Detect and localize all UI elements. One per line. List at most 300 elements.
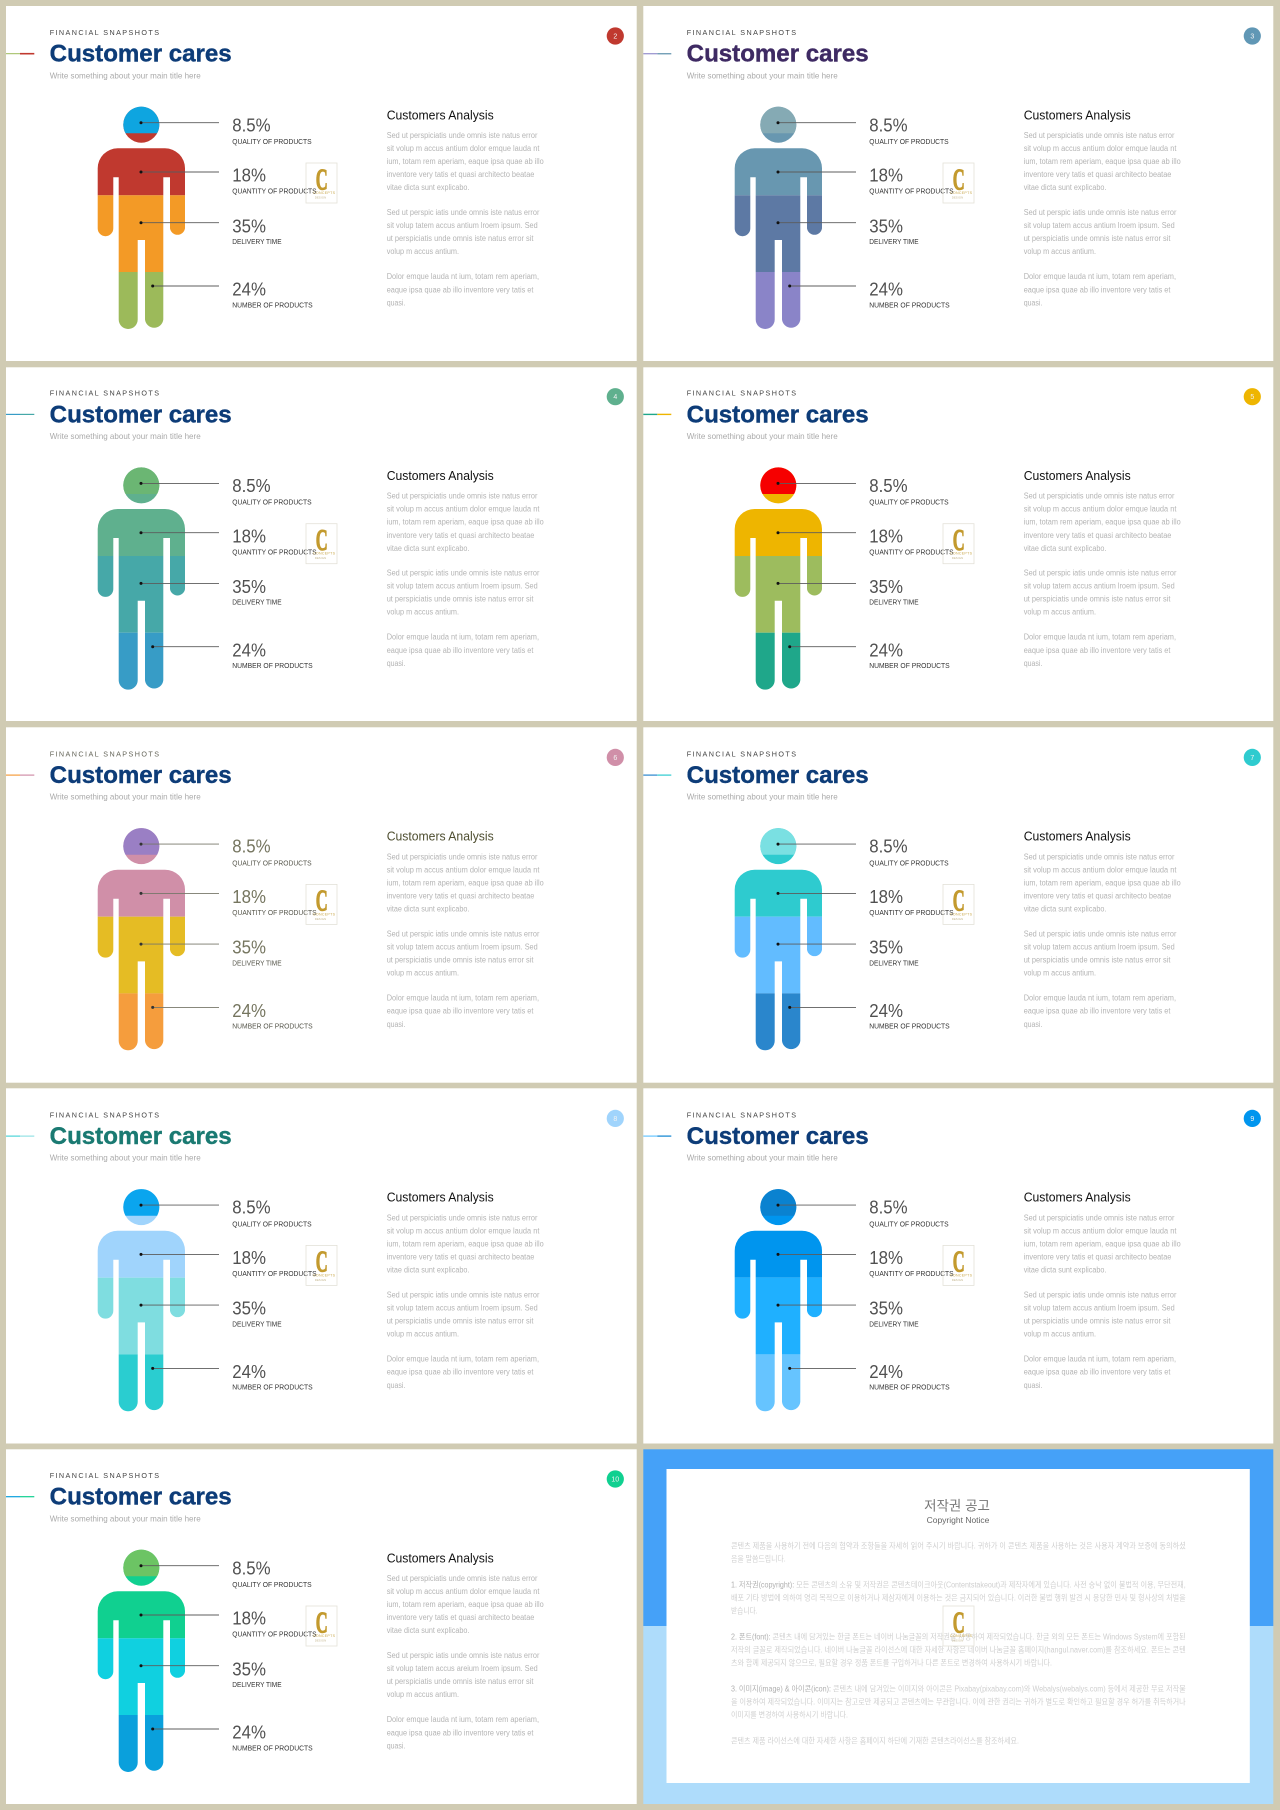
title: Customer cares: [687, 41, 869, 68]
callout: quantity of products: [776, 166, 954, 196]
notice body text: 이미지를 변경하여 사용하시기 바랍니다.: [731, 1709, 848, 1719]
watermark logo: [306, 1244, 337, 1285]
analysis body text: sit volup m accus antium dolor emque lauda nt: [1024, 865, 1177, 874]
analysis body text: quasi.: [1024, 1381, 1042, 1390]
watermark logo: C: [316, 522, 328, 557]
watermark logo: CONCEPTS: [313, 191, 336, 195]
analysis heading: Customers Analysis: [387, 469, 494, 483]
watermark logo: C: [316, 1604, 328, 1639]
accent line: [6, 414, 34, 415]
analysis body text: Dolor emque lauda nt ium, totam rem aperiam,: [387, 272, 539, 281]
analysis body text: ium, totam rem aperiam, eaque ipsa quae ab illo: [1024, 1239, 1181, 1248]
analysis body text: vitae dicta sunt explicabo.: [1024, 1266, 1106, 1275]
watermark logo: C: [953, 161, 965, 196]
analysis heading: Customers Analysis: [1024, 108, 1131, 122]
page badge: 4: [613, 394, 617, 401]
callout: delivery time: [776, 216, 919, 246]
callout: quantity of products: 18%: [869, 166, 903, 186]
callout: quantity of products: 18%: [232, 166, 266, 186]
analysis body text: Dolor emque lauda nt ium, totam rem aperiam,: [387, 633, 539, 642]
callout: delivery time: [776, 938, 919, 967]
watermark logo: CONCEPTS: [950, 1634, 973, 1638]
callout: quality of products: 8.5%: [869, 1198, 908, 1218]
human figure: [732, 467, 824, 693]
analysis body text: Sed ut perspic iatis unde omnis iste natus error: [387, 1290, 540, 1299]
watermark logo: CONCEPTS: [950, 912, 973, 916]
analysis body text: inventore very tatis et quasi architecto beatae: [1024, 170, 1172, 179]
analysis body text: eaque ipsa quae ab illo inventore very tatis et: [387, 646, 534, 655]
analysis body text: vitae dicta sunt explicabo.: [387, 544, 469, 553]
callout: number of products: 24%: [869, 1001, 903, 1021]
eyebrow: FINANCIAL SNAPSHOTS: [687, 28, 796, 37]
eyebrow: FINANCIAL SNAPSHOTS: [50, 389, 159, 398]
callout: number of products: 24%: [869, 640, 903, 660]
watermark logo: CONCEPTS: [313, 1634, 336, 1638]
analysis body text: quasi.: [387, 1020, 405, 1029]
analysis body text: volup m accus antium.: [1024, 968, 1096, 977]
panel: slide 6 purple pink yellow: [6, 727, 637, 1083]
callout: number of products: [151, 280, 313, 309]
analysis body text: ium, totam rem aperiam, eaque ipsa quae ab illo: [387, 157, 544, 166]
analysis body text: inventore very tatis et quasi architecto beatae: [387, 1613, 535, 1622]
callout: number of products: NUMBER OF PRODUCTS: [232, 661, 313, 670]
analysis body text: ut perspiciatis unde omnis iste natus error sit: [387, 1316, 534, 1325]
analysis body text: Dolor emque lauda nt ium, totam rem aperiam,: [387, 1715, 539, 1724]
page badge: [607, 1470, 624, 1488]
analysis body text: Sed ut perspiciatis unde omnis iste natus error: [1024, 492, 1175, 501]
subtitle: Write something about your main title here: [50, 431, 201, 441]
panel: slide 7 aqua sky blue: [643, 727, 1273, 1083]
callout: delivery time: DELIVERY TIME: [869, 237, 919, 246]
callout: quality of products: 8.5%: [869, 837, 908, 857]
analysis body text: sit volup m accus antium dolor emque lauda nt: [387, 505, 540, 514]
panel: slide 4 green teal: [6, 367, 637, 721]
watermark logo: C: [953, 883, 965, 918]
analysis body text: [387, 1213, 544, 1390]
callout: delivery time: 35%: [232, 938, 266, 958]
analysis heading: Customers Analysis: [387, 830, 494, 844]
callout: number of products: 24%: [232, 280, 266, 300]
callout: quantity of products: QUANTITY OF PRODUCTS: [232, 1630, 317, 1639]
analysis body text: ium, totam rem aperiam, eaque ipsa quae ab illo: [1024, 878, 1181, 887]
analysis body text: eaque ipsa quae ab illo inventore very tatis et: [387, 1007, 534, 1016]
page badge: [1244, 27, 1261, 45]
callout: quality of products: [776, 1198, 949, 1228]
accent line: [6, 53, 34, 54]
analysis body text: Sed ut perspic iatis unde omnis iste natus error: [387, 929, 540, 938]
analysis body text: inventore very tatis et quasi architecto beatae: [387, 170, 535, 179]
analysis body text: volup m accus antium.: [1024, 608, 1096, 617]
callout: quality of products: QUALITY OF PRODUCTS: [232, 1580, 312, 1589]
analysis body text: ium, totam rem aperiam, eaque ipsa quae ab illo: [387, 878, 544, 887]
notice body text: 음을 말씀드립니다.: [731, 1553, 786, 1563]
callout: number of products: [151, 640, 313, 670]
notice body text: 콘텐츠 제품을 사용하기 전에 다음의 협약과 조항들을 자세히 읽어 주시기 바랍니다. 귀하가 이 콘텐츠 제품을 사용하는 것은 사용자 계약과 보증에 동의하셨: [731, 1541, 1186, 1551]
analysis body text: Dolor emque lauda nt ium, totam rem aperiam,: [1024, 993, 1176, 1002]
callout: quantity of products: QUANTITY OF PRODUCTS: [232, 187, 317, 196]
analysis body text: [1024, 1213, 1181, 1390]
watermark logo: [306, 883, 337, 924]
callout: quality of products: [776, 115, 949, 146]
callout: quality of products: 8.5%: [232, 837, 271, 857]
analysis body text: ium, totam rem aperiam, eaque ipsa quae ab illo: [387, 1600, 544, 1609]
analysis heading: Customers Analysis: [387, 1191, 494, 1205]
callout: quantity of products: QUANTITY OF PRODUCTS: [869, 547, 954, 556]
title: Customer cares: [687, 401, 869, 428]
analysis heading: Customers Analysis: [387, 1551, 494, 1565]
subtitle: Write something about your main title here: [687, 792, 838, 802]
analysis body text: quasi.: [1024, 1020, 1042, 1029]
watermark logo: DESIGN: [952, 1279, 963, 1282]
page badge: [607, 1110, 624, 1127]
panel: slide 8 light blue teal: [6, 1088, 637, 1444]
watermark logo: DESIGN: [952, 196, 963, 200]
analysis body text: ut perspiciatis unde omnis iste natus error sit: [387, 234, 534, 243]
callout: quantity of products: 18%: [869, 526, 903, 546]
human figure: [95, 107, 187, 332]
watermark logo: DESIGN: [315, 557, 326, 560]
watermark logo: CONCEPTS: [313, 912, 336, 916]
watermark logo: DESIGN: [952, 918, 963, 921]
callout: number of products: [788, 1001, 950, 1031]
analysis body text: ium, totam rem aperiam, eaque ipsa quae ab illo: [387, 1239, 544, 1248]
analysis body text: Sed ut perspiciatis unde omnis iste natus error: [1024, 1213, 1175, 1222]
callout: quantity of products: [140, 526, 317, 556]
callout: delivery time: DELIVERY TIME: [232, 598, 282, 607]
analysis body text: quasi.: [387, 1742, 405, 1750]
callout: number of products: [151, 1362, 313, 1392]
human figure: [732, 828, 824, 1053]
watermark logo: C: [953, 1244, 965, 1279]
callout: number of products: 24%: [869, 280, 903, 300]
callout: delivery time: DELIVERY TIME: [869, 958, 919, 967]
analysis body text: eaque ipsa quae ab illo inventore very tatis et: [1024, 1368, 1171, 1377]
callout: number of products: NUMBER OF PRODUCTS: [869, 300, 950, 309]
analysis heading: Customers Analysis: [1024, 1191, 1131, 1205]
analysis body text: sit volup tatem accus areium lroem ipsum. Sed: [387, 1664, 538, 1673]
analysis body text: eaque ipsa quae ab illo inventore very tatis et: [387, 1728, 534, 1737]
analysis body text: inventore very tatis et quasi architecto beatae: [387, 892, 535, 901]
human figure: [95, 1189, 187, 1414]
analysis body text: sit volup m accus antium dolor emque lauda nt: [387, 1587, 540, 1596]
callout: number of products: [151, 1001, 313, 1031]
notice white card: [666, 1469, 1250, 1783]
callout: quality of products: 8.5%: [869, 476, 908, 496]
callout: number of products: 24%: [232, 1362, 266, 1382]
analysis body text: quasi.: [387, 659, 405, 668]
analysis body text: sit volup tatem accus antium lroem ipsum. Sed: [387, 1303, 538, 1312]
watermark logo: DESIGN: [952, 1640, 963, 1642]
analysis body text: eaque ipsa quae ab illo inventore very tatis et: [387, 285, 534, 294]
callout: number of products: NUMBER OF PRODUCTS: [232, 1383, 313, 1392]
analysis body text: vitae dicta sunt explicabo.: [1024, 183, 1106, 192]
analysis body text: volup m accus antium.: [387, 247, 459, 256]
panel: slide 9 blues: [643, 1088, 1273, 1444]
page badge: 6: [613, 755, 617, 762]
notice background bottom: [643, 1626, 1273, 1804]
notice body text: [731, 1541, 1186, 1745]
analysis body text: ut perspiciatis unde omnis iste natus error sit: [387, 595, 534, 604]
callout: quality of products: [140, 1558, 312, 1589]
callout: quality of products: 8.5%: [232, 115, 271, 135]
watermark logo: [306, 1604, 337, 1646]
accent line: [6, 1136, 34, 1137]
watermark logo: CONCEPTS: [950, 191, 973, 195]
human figure: [732, 107, 824, 332]
callout: quantity of products: QUANTITY OF PRODUCTS: [232, 1269, 317, 1278]
analysis body text: Sed ut perspiciatis unde omnis iste natus error: [1024, 852, 1175, 861]
watermark logo: C: [316, 883, 328, 918]
analysis body text: sit volup m accus antium dolor emque lauda nt: [1024, 1226, 1177, 1235]
analysis body text: vitae dicta sunt explicabo.: [1024, 905, 1106, 914]
watermark logo: [943, 522, 974, 564]
watermark logo: DESIGN: [315, 918, 326, 921]
notice body text: 1. 저작권(copyright): 모든 콘텐츠의 소유 및 저작권은 콘텐츠테이크아웃(Contentstakeout)과 제작자에게 있습니다. 사전 승낙 없이 불법적 이용, 무단전재,: [731, 1579, 1186, 1589]
callout: delivery time: [140, 938, 282, 967]
analysis body text: Sed ut perspiciatis unde omnis iste natus error: [387, 1574, 538, 1583]
analysis body text: [1024, 852, 1181, 1029]
analysis body text: inventore very tatis et quasi architecto beatae: [387, 531, 535, 540]
analysis body text: [1024, 131, 1181, 308]
callout: quality of products: QUALITY OF PRODUCTS: [232, 858, 312, 867]
analysis body text: Dolor emque lauda nt ium, totam rem aperiam,: [1024, 1354, 1176, 1363]
title: Customer cares: [50, 41, 232, 68]
analysis body text: ut perspiciatis unde omnis iste natus error sit: [1024, 1316, 1171, 1325]
callout: delivery time: DELIVERY TIME: [232, 958, 282, 967]
analysis body text: ium, totam rem aperiam, eaque ipsa quae ab illo: [1024, 157, 1181, 166]
watermark logo: DESIGN: [315, 1279, 326, 1282]
panel: slide 10 green cyan blue: [6, 1449, 637, 1804]
page badge: 10: [611, 1476, 619, 1484]
callout: quality of products: [140, 476, 312, 507]
callout: quality of products: 8.5%: [232, 1198, 271, 1218]
callout: quantity of products: 18%: [232, 887, 266, 907]
callout: quality of products: QUALITY OF PRODUCTS: [869, 1219, 949, 1228]
analysis body text: sit volup tatem accus antium lroem ipsum. Sed: [387, 221, 538, 230]
callout: quantity of products: 18%: [232, 1248, 266, 1268]
eyebrow: FINANCIAL SNAPSHOTS: [687, 389, 796, 398]
analysis body text: quasi.: [1024, 659, 1042, 668]
accent line: [6, 1496, 34, 1497]
callout: number of products: NUMBER OF PRODUCTS: [869, 1383, 950, 1392]
eyebrow: FINANCIAL SNAPSHOTS: [50, 1471, 159, 1480]
eyebrow: FINANCIAL SNAPSHOTS: [50, 28, 159, 37]
notice background top: [643, 1449, 1273, 1626]
callout: delivery time: 35%: [869, 938, 903, 958]
callout: delivery time: DELIVERY TIME: [232, 1680, 282, 1689]
analysis body text: Sed ut perspiciatis unde omnis iste natus error: [1024, 131, 1175, 140]
callout: quality of products: QUALITY OF PRODUCTS: [869, 498, 949, 507]
callout: quality of products: QUALITY OF PRODUCTS: [232, 498, 312, 507]
watermark logo: [306, 522, 337, 564]
callout: number of products: [788, 280, 950, 309]
human figure: [95, 1550, 187, 1775]
callout: number of products: 24%: [232, 640, 266, 660]
callout: delivery time: DELIVERY TIME: [232, 1319, 282, 1328]
callout: quality of products: [776, 476, 949, 507]
callout: quantity of products: [140, 1248, 317, 1278]
callout: quantity of products: QUANTITY OF PRODUCTS: [232, 908, 317, 917]
subtitle: Write something about your main title here: [50, 70, 201, 80]
callout: number of products: NUMBER OF PRODUCTS: [232, 1743, 313, 1752]
analysis body text: Sed ut perspic iatis unde omnis iste natus error: [1024, 1290, 1177, 1299]
analysis body text: volup m accus antium.: [387, 968, 459, 977]
callout: delivery time: 35%: [232, 1299, 266, 1319]
human figure: [732, 1189, 824, 1414]
notice title korean: 저작권 공고: [924, 1499, 990, 1514]
callout: delivery time: DELIVERY TIME: [869, 1319, 919, 1328]
callout: number of products: 24%: [869, 1362, 903, 1382]
callout: quality of products: QUALITY OF PRODUCTS: [232, 1219, 312, 1228]
callout: quantity of products: QUANTITY OF PRODUCTS: [869, 187, 954, 196]
accent line: [6, 774, 34, 776]
analysis body text: [387, 131, 544, 308]
callout: quality of products: 8.5%: [869, 115, 908, 135]
callout: delivery time: [140, 577, 282, 607]
watermark logo: CONCEPTS: [313, 1273, 336, 1277]
analysis body text: [387, 852, 544, 1029]
analysis body text: quasi.: [387, 1381, 405, 1390]
page badge: [607, 27, 624, 45]
analysis body text: vitae dicta sunt explicabo.: [387, 1266, 469, 1275]
callout: delivery time: [140, 1299, 282, 1328]
watermark logo: [943, 1604, 974, 1646]
callout: delivery time: DELIVERY TIME: [869, 598, 919, 607]
panel: copyright notice: [643, 1449, 1273, 1804]
eyebrow: FINANCIAL SNAPSHOTS: [50, 1110, 159, 1119]
watermark logo: DESIGN: [315, 196, 326, 200]
analysis body text: [387, 492, 544, 668]
notice body text: 받습니다.: [731, 1606, 758, 1616]
callout: number of products: [788, 1362, 950, 1392]
human figure: [95, 467, 187, 693]
page badge: 7: [1250, 755, 1254, 762]
callout: number of products: NUMBER OF PRODUCTS: [232, 300, 313, 309]
analysis body text: sit volup m accus antium dolor emque lauda nt: [1024, 144, 1177, 153]
analysis body text: inventore very tatis et quasi architecto beatae: [1024, 892, 1172, 901]
analysis body text: Dolor emque lauda nt ium, totam rem aperiam,: [387, 1354, 539, 1363]
page badge: [1244, 749, 1261, 766]
callout: quantity of products: 18%: [232, 1609, 266, 1629]
analysis body text: Sed ut perspic iatis unde omnis iste natus error: [1024, 208, 1177, 217]
human figure: [95, 828, 187, 1053]
analysis body text: sit volup m accus antium dolor emque lauda nt: [387, 144, 540, 153]
analysis body text: volup m accus antium.: [387, 1329, 459, 1338]
analysis body text: Dolor emque lauda nt ium, totam rem aperiam,: [1024, 633, 1176, 642]
analysis body text: Sed ut perspiciatis unde omnis iste natus error: [387, 852, 538, 861]
page badge: [607, 749, 624, 766]
eyebrow: FINANCIAL SNAPSHOTS: [687, 749, 796, 758]
title: Customer cares: [50, 762, 232, 789]
analysis heading: Customers Analysis: [1024, 469, 1131, 483]
callout: number of products: 24%: [232, 1723, 266, 1743]
analysis body text: Sed ut perspic iatis unde omnis iste natus error: [1024, 569, 1177, 578]
notice title english: Copyright Notice: [927, 1515, 990, 1525]
analysis body text: Sed ut perspic iatis unde omnis iste natus error: [387, 1651, 540, 1660]
panel: slide 3 blue purple: [643, 6, 1273, 361]
subtitle: Write something about your main title here: [50, 1513, 201, 1523]
analysis body text: volup m accus antium.: [387, 608, 459, 617]
page badge: [607, 388, 624, 405]
page badge: 3: [1250, 34, 1254, 40]
watermark logo: DESIGN: [952, 557, 963, 560]
panel: slide 2 red orange green: [6, 6, 637, 361]
analysis body text: ut perspiciatis unde omnis iste natus error sit: [387, 955, 534, 964]
callout: quantity of products: QUANTITY OF PRODUCTS: [232, 547, 317, 556]
analysis body text: ut perspiciatis unde omnis iste natus error sit: [1024, 955, 1171, 964]
analysis body text: Sed ut perspiciatis unde omnis iste natus error: [387, 492, 538, 501]
subtitle: Write something about your main title here: [687, 1153, 838, 1163]
accent line: [643, 414, 671, 415]
callout: delivery time: 35%: [232, 577, 266, 597]
eyebrow: FINANCIAL SNAPSHOTS: [50, 749, 159, 758]
analysis body text: Sed ut perspic iatis unde omnis iste natus error: [387, 569, 540, 578]
watermark logo: C: [953, 1604, 965, 1639]
subtitle: Write something about your main title here: [50, 1153, 201, 1163]
page badge: 2: [613, 34, 617, 40]
title: Customer cares: [50, 1123, 232, 1150]
watermark logo: [943, 883, 974, 924]
analysis body text: sit volup tatem accus antium lroem ipsum. Sed: [387, 582, 538, 591]
analysis body text: ut perspiciatis unde omnis iste natus error sit: [387, 1677, 534, 1686]
analysis body text: vitae dicta sunt explicabo.: [1024, 544, 1106, 553]
title: Customer cares: [687, 1123, 869, 1150]
eyebrow: FINANCIAL SNAPSHOTS: [687, 1110, 796, 1119]
callout: delivery time: DELIVERY TIME: [232, 237, 282, 246]
notice body text: 배포 기타 방법에 의하여 영리 목적으로 이용하거나 제삼자에게 이용하는 것은 금지되어 있습니다. 이러한 불법 행위 발견 시 응당한 민사 및 형사상의 처벌을: [731, 1592, 1186, 1602]
callout: quantity of products: 18%: [869, 887, 903, 907]
analysis body text: Dolor emque lauda nt ium, totam rem aperiam,: [387, 993, 539, 1002]
callout: quantity of products: [776, 887, 954, 917]
analysis body text: vitae dicta sunt explicabo.: [387, 1626, 469, 1635]
analysis body text: sit volup m accus antium dolor emque lauda nt: [1024, 505, 1177, 514]
analysis body text: vitae dicta sunt explicabo.: [387, 183, 469, 192]
analysis body text: sit volup tatem accus antium lroem ipsum. Sed: [1024, 582, 1175, 591]
callout: quantity of products: [140, 166, 317, 196]
watermark logo: C: [316, 161, 328, 196]
analysis heading: Customers Analysis: [387, 108, 494, 122]
callout: quality of products: QUALITY OF PRODUCTS: [869, 858, 949, 867]
callout: quality of products: [140, 837, 312, 867]
callout: delivery time: 35%: [869, 216, 903, 236]
callout: quality of products: [776, 837, 949, 867]
callout: quality of products: QUALITY OF PRODUCTS: [869, 137, 949, 146]
analysis body text: [387, 1574, 544, 1750]
notice body text: 3. 이미지(image) & 아이콘(icon): 콘텐츠 내에 담겨있는 이미지와 아이콘은 Pixabay(pixabay.com)와 Webalys(webalys.com) 등에서 제공한 무료 저작물: [731, 1683, 1186, 1693]
page badge: 5: [1250, 394, 1254, 401]
callout: delivery time: 35%: [869, 577, 903, 597]
watermark logo: DESIGN: [315, 1640, 326, 1642]
callout: number of products: [151, 1723, 313, 1752]
panel: slide 5 red yellow green: [643, 367, 1273, 721]
callout: quantity of products: [776, 526, 954, 556]
page badge: [1244, 1110, 1261, 1127]
watermark logo: CONCEPTS: [950, 1273, 973, 1277]
subtitle: Write something about your main title here: [50, 792, 201, 802]
analysis body text: ut perspiciatis unde omnis iste natus error sit: [1024, 234, 1171, 243]
notice body text: 저작의 글꼴로 제작되었습니다. 네이버 나눔글꼴 라이선스에 대한 자세한 사항은 네이버 나눔글꼴 홈페이지(hangul.naver.com)를 참조하세요. 폰트는 콘텐: [731, 1644, 1186, 1654]
analysis body text: Sed ut perspic iatis unde omnis iste natus error: [387, 208, 540, 217]
analysis body text: inventore very tatis et quasi architecto beatae: [1024, 1253, 1172, 1262]
analysis heading: Customers Analysis: [1024, 830, 1131, 844]
analysis body text: quasi.: [387, 298, 405, 308]
page badge: 8: [613, 1116, 617, 1123]
analysis body text: sit volup m accus antium dolor emque lauda nt: [387, 1226, 540, 1235]
callout: number of products: NUMBER OF PRODUCTS: [869, 661, 950, 670]
analysis body text: ut perspiciatis unde omnis iste natus error sit: [1024, 595, 1171, 604]
analysis body text: volup m accus antium.: [1024, 1329, 1096, 1338]
callout: delivery time: [776, 577, 919, 607]
